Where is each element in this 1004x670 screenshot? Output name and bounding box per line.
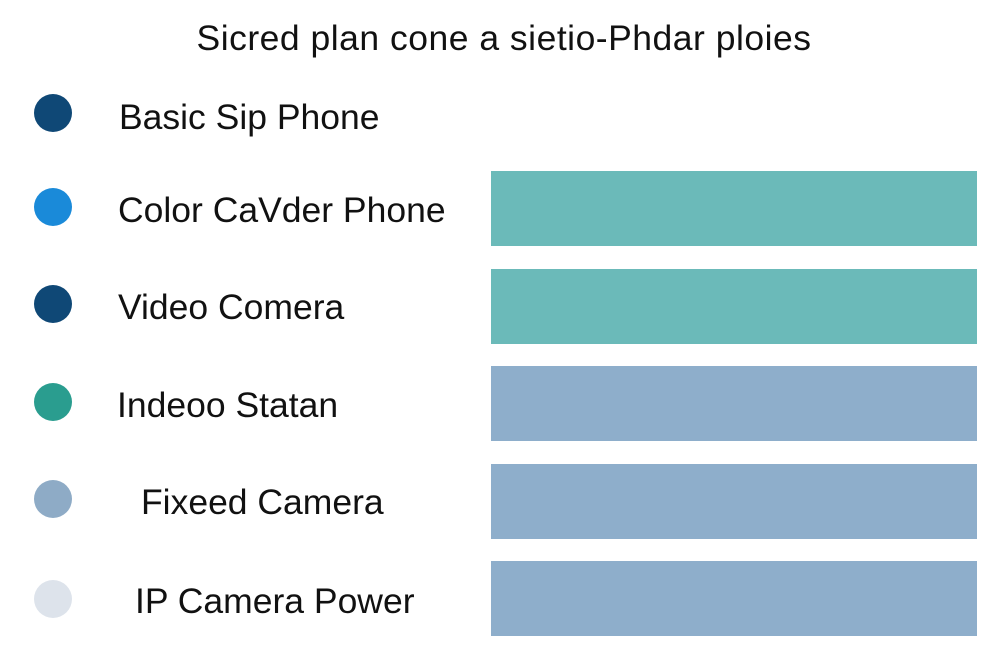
label: Fixeed Camera (141, 482, 384, 522)
icon: teal dot (34, 383, 72, 421)
label: Video Comera (118, 287, 344, 327)
icon: grey-blue dot (34, 480, 72, 518)
icon: dark blue dot (34, 94, 72, 132)
legend row: Video Comera (34, 285, 344, 327)
bar 1 (491, 171, 977, 246)
icon: pale dot (34, 580, 72, 618)
bar 2 (491, 269, 977, 344)
label: Basic Sip Phone (119, 97, 380, 137)
icon: bright blue dot (34, 188, 72, 226)
label: IP Camera Power (135, 581, 415, 621)
bar 3 (491, 366, 977, 441)
bar 5 (491, 561, 977, 636)
title: Sicred plan cone a sietio-Phdar ploies (197, 18, 811, 58)
legend row: Indeoo Statan (34, 383, 338, 425)
label: Indeoo Statan (117, 385, 338, 425)
legend row: Fixeed Camera (34, 480, 384, 522)
bar 4 (491, 464, 977, 539)
bar chart (491, 171, 977, 636)
icon: dark blue dot (34, 285, 72, 323)
legend row: Color CaVder Phone (34, 188, 446, 230)
label: Color CaVder Phone (118, 190, 446, 230)
legend row: IP Camera Power (34, 580, 415, 621)
legend row: Basic Sip Phone (34, 94, 380, 137)
